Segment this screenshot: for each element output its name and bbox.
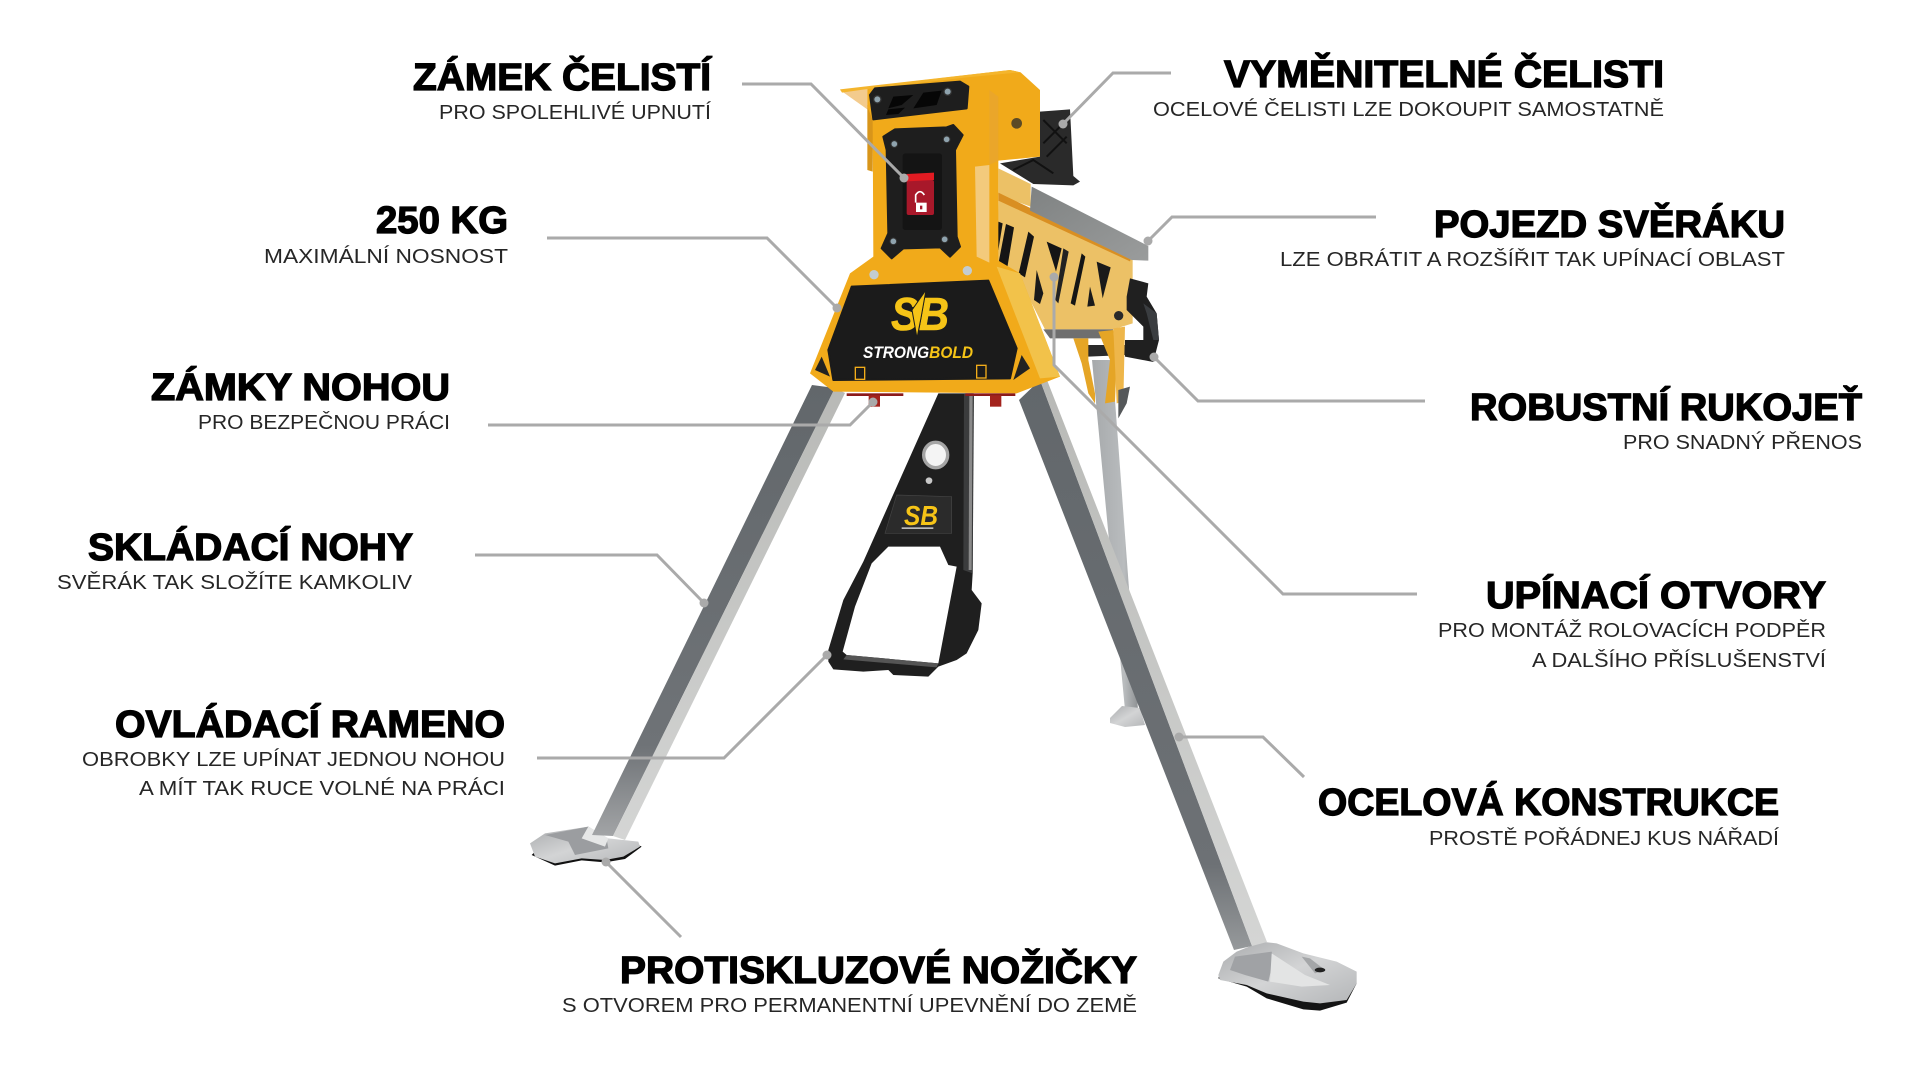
arm round hole	[924, 442, 948, 468]
yellow body	[810, 70, 1060, 393]
red leg locks	[847, 393, 1015, 407]
callout: jaw lock	[413, 54, 712, 124]
red lock switch	[907, 173, 934, 215]
leader: replaceable jaws	[1058, 73, 1171, 128]
leader: leg locks	[488, 398, 878, 425]
operating arm	[828, 393, 982, 677]
leader: operating arm	[537, 650, 832, 758]
callout: operating arm: OVLÁDACÍ RAMENO	[115, 702, 505, 746]
callout: clamping holes: UPÍNACÍ OTVORY	[1486, 573, 1826, 617]
callout: steel frame	[1318, 780, 1779, 850]
sliding rail	[1030, 187, 1148, 261]
callout: replaceable jaws	[1153, 51, 1664, 121]
callout: max load	[264, 200, 508, 268]
callout: replaceable jaws: VYMĚNITELNÉ ČELISTI	[1224, 51, 1664, 96]
callout: vise carriage: LZE OBRÁTIT A ROZŠÍŘIT TAK UPÍNACÍ OBLAST	[1280, 248, 1785, 271]
leader: anti-slip feet	[602, 858, 681, 937]
right foot	[1218, 942, 1357, 1011]
callout: operating arm: A MÍT TAK RUCE VOLNÉ NA PRÁCI	[139, 777, 505, 800]
callout: anti-slip feet	[562, 947, 1137, 1017]
callout: folding legs	[57, 525, 413, 594]
arm badge	[885, 495, 952, 533]
base screws	[869, 266, 972, 279]
yellow bracket	[1073, 327, 1130, 418]
leader: clamping holes	[1050, 272, 1417, 594]
leader: robust handle	[1150, 352, 1425, 401]
upper clamp pad	[870, 82, 968, 119]
callout: robust handle: PRO SNADNÝ PŘENOS	[1623, 431, 1862, 454]
leader: jaw lock	[742, 84, 908, 182]
callout: clamping holes: A DALŠÍHO PŘÍSLUŠENSTVÍ	[1532, 649, 1826, 672]
left foot	[530, 827, 642, 866]
callout: steel frame: OCELOVÁ KONSTRUKCE	[1318, 780, 1779, 824]
leader: steel frame	[1174, 732, 1304, 777]
callout: anti-slip feet: PROTISKLUZOVÉ NOŽIČKY	[620, 947, 1137, 992]
callout: jaw lock: ZÁMEK ČELISTÍ	[413, 54, 712, 99]
roller	[1080, 345, 1127, 357]
callout: robust handle	[1470, 385, 1862, 454]
callout: vise carriage: POJEZD SVĚRÁKU	[1434, 202, 1785, 246]
callout: steel frame: PROSTĚ POŘÁDNEJ KUS NÁŘADÍ	[1429, 827, 1779, 850]
lattice beam	[997, 168, 1133, 338]
vise head	[810, 70, 1060, 407]
callout: jaw lock: PRO SPOLEHLIVÉ UPNUTÍ	[439, 101, 711, 124]
callout: operating arm	[82, 702, 505, 800]
jaw lock plate	[882, 125, 963, 258]
back leg	[1092, 360, 1145, 727]
callout: replaceable jaws: OCELOVÉ ČELISTI LZE DOKOUPIT SAMOSTATNĚ	[1153, 98, 1664, 121]
callout: leg locks: ZÁMKY NOHOU	[151, 365, 450, 409]
callout: clamping holes	[1438, 573, 1826, 672]
callout: robust handle: ROBUSTNÍ RUKOJEŤ	[1470, 385, 1862, 429]
brand logo	[863, 288, 973, 362]
callout: leg locks: PRO BEZPEČNOU PRÁCI	[198, 411, 450, 434]
callout: leg locks	[151, 365, 450, 434]
brand logo: SB	[891, 288, 949, 340]
replaceable jaw	[1000, 109, 1080, 185]
callout: clamping holes: PRO MONTÁŽ ROLOVACÍCH PODPĚR	[1438, 619, 1826, 642]
leader: vise carriage	[1144, 217, 1376, 246]
leader: max load	[547, 238, 842, 312]
brand logo: STRONGBOLD	[863, 343, 973, 362]
callout: anti-slip feet: S OTVOREM PRO PERMANENTNÍ UPEVNĚNÍ DO ZEMĚ	[562, 994, 1137, 1017]
leader: folding legs	[475, 555, 708, 608]
callout: folding legs: SKLÁDACÍ NOHY	[88, 525, 413, 569]
carry handle	[1114, 278, 1159, 362]
callout: folding legs: SVĚRÁK TAK SLOŽÍTE KAMKOLIV	[57, 571, 413, 594]
beam and jaws	[997, 109, 1159, 418]
padlock icon	[916, 192, 927, 212]
callout: max load: MAXIMÁLNÍ NOSNOST	[264, 245, 508, 268]
left leg	[592, 385, 845, 840]
black base panel	[828, 281, 1017, 380]
product: workbench vise	[530, 70, 1357, 1011]
arm logo: SB	[904, 500, 938, 531]
right leg	[1019, 380, 1267, 950]
callout: operating arm: OBROBKY LZE UPÍNAT JEDNOU NOHOU	[82, 748, 505, 771]
callout: max load: 250 KG	[376, 200, 508, 242]
callout: vise carriage	[1280, 202, 1785, 271]
back plate wing	[840, 87, 867, 109]
